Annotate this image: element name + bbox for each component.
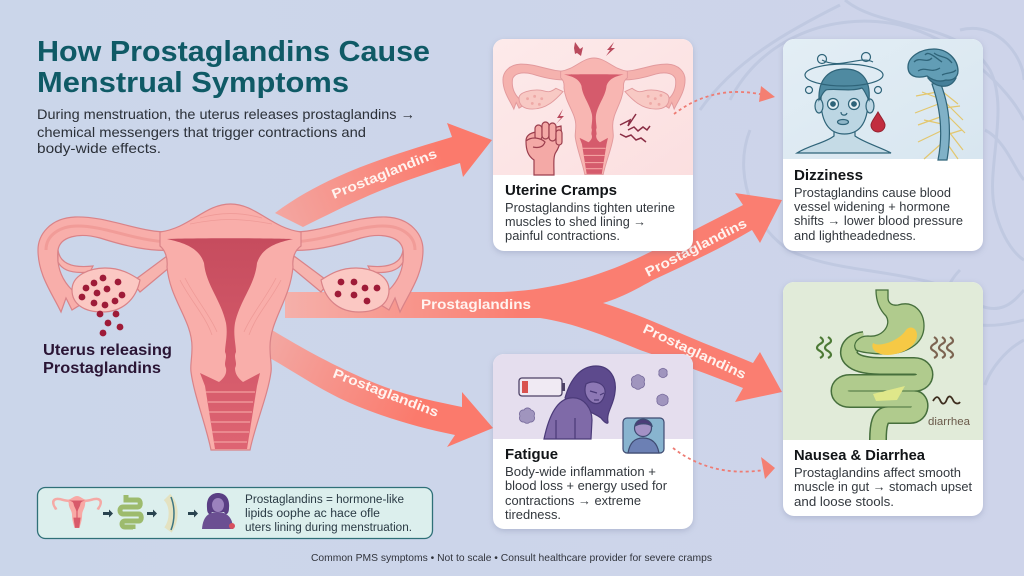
prostaglandin dots: [79, 275, 380, 336]
body text: muscles to shed lining →: [505, 214, 646, 229]
body text: Prostaglandins cause blood: [794, 185, 951, 200]
body text: shifts → lower blood pressure: [794, 213, 963, 228]
icon: stomach: [855, 290, 924, 354]
intro text: During menstruation, the uterus releases prostaglandins →: [37, 106, 415, 122]
icon: stress clouds: [519, 368, 668, 423]
body text: [505, 464, 668, 522]
heading: Fatigue: [505, 446, 558, 463]
body text: muscle in gut → stomach upset: [794, 479, 972, 494]
label: centre: Prostaglandins: [421, 297, 531, 312]
arrow: dotted cramps to dizziness: [674, 86, 775, 114]
uterus illustration: [38, 204, 423, 450]
icon: intestines: [840, 340, 924, 440]
icon: irritation: [873, 386, 905, 401]
icon: nerves: [915, 88, 965, 159]
icon: cramps waves: [931, 337, 953, 358]
title: [37, 36, 430, 99]
body text: Prostaglandins affect smooth: [794, 465, 961, 480]
panel: dizziness: [783, 39, 983, 251]
uterus label: Prostaglandins: [43, 360, 161, 377]
callout: definition box: [38, 488, 432, 538]
arrow: prostaglandins to uterine cramps: [275, 123, 492, 227]
icon: battery: [519, 378, 565, 396]
body text: contractions → extreme: [505, 493, 641, 508]
body text: vessel widening + hormone: [794, 199, 950, 214]
icon: nausea waves: [817, 337, 831, 358]
body text: Body-wide inflammation +: [505, 464, 656, 479]
uterus label: [43, 342, 172, 377]
label: lower branch: Prostaglandins: [641, 321, 749, 382]
icon: woman: [544, 366, 615, 439]
icon: spinal cord: [932, 82, 949, 160]
body text: blood loss + energy used for: [505, 478, 668, 493]
uterus label: Uterus releasing: [43, 342, 172, 359]
callout text: uters lining during menstruation.: [245, 522, 412, 534]
title: Menstrual Symptoms: [37, 67, 349, 99]
body text: and lightheadedness.: [794, 228, 916, 243]
arrow: prostaglandins to dizziness and nausea: [285, 193, 782, 402]
callout text: lipids oophe ac hace ofle: [245, 508, 380, 520]
icon: uterus: [503, 58, 685, 174]
icon: cramp squiggles: [620, 114, 650, 142]
intro text: [37, 106, 415, 156]
icon: dizzy head: [797, 52, 891, 153]
arrow: prostaglandins to fatigue: [268, 330, 493, 447]
icon: mini spine: [167, 497, 174, 530]
icon: bile: [872, 328, 917, 355]
uterine body: [160, 204, 301, 450]
body text: tiredness.: [505, 507, 561, 522]
icon: blood drop: [871, 112, 885, 132]
footer note: Common PMS symptoms • Not to scale • Consult healthcare provider for severe cramps: [311, 552, 712, 564]
callout text: Prostaglandins = hormone-like: [245, 494, 404, 506]
body text: and loose stools.: [794, 494, 894, 509]
arrow: prostaglandins to uterine cramps: Prostaglandins: [330, 146, 439, 202]
label: diarrhea: diarrhea: [928, 416, 971, 428]
arrow: prostaglandins to fatigue: Prostaglandins: [331, 366, 441, 420]
right tube and ovary: [286, 217, 423, 312]
icon: mini intestines: [120, 495, 141, 529]
body text: [794, 465, 972, 509]
heading: Nausea & Diarrhea: [794, 447, 926, 464]
body text: painful contractions.: [505, 228, 620, 243]
arrow: dotted fatigue to nausea: [673, 448, 775, 479]
icon: mini arrows: [103, 510, 198, 518]
label: upper branch: Prostaglandins: [643, 215, 749, 280]
icon: lightning bolts: [556, 42, 615, 124]
panel: fatigue: [493, 354, 693, 529]
body text: [505, 200, 675, 243]
icon: brain: [908, 49, 958, 86]
heading: Uterine Cramps: [505, 182, 617, 199]
icon: mini uterus: [52, 496, 102, 528]
uterine cavity: [167, 238, 293, 449]
panel: uterine cramps: [493, 39, 693, 251]
icon: squiggle: [933, 396, 960, 404]
intro text: chemical messengers that trigger contractions and: [37, 124, 366, 140]
title: How Prostaglandins Cause: [37, 36, 430, 68]
intro text: body-wide effects.: [37, 140, 161, 156]
icon: fist: [526, 122, 562, 175]
icon: person on pillow: [623, 418, 664, 453]
icon: mini woman: [202, 493, 235, 529]
panel: nausea and diarrhea: [783, 282, 983, 516]
body text: [794, 185, 963, 243]
left tube and ovary: [38, 217, 175, 312]
body text: Prostaglandins tighten uterine: [505, 200, 675, 215]
heading: Dizziness: [794, 167, 863, 184]
callout text: [245, 494, 412, 534]
